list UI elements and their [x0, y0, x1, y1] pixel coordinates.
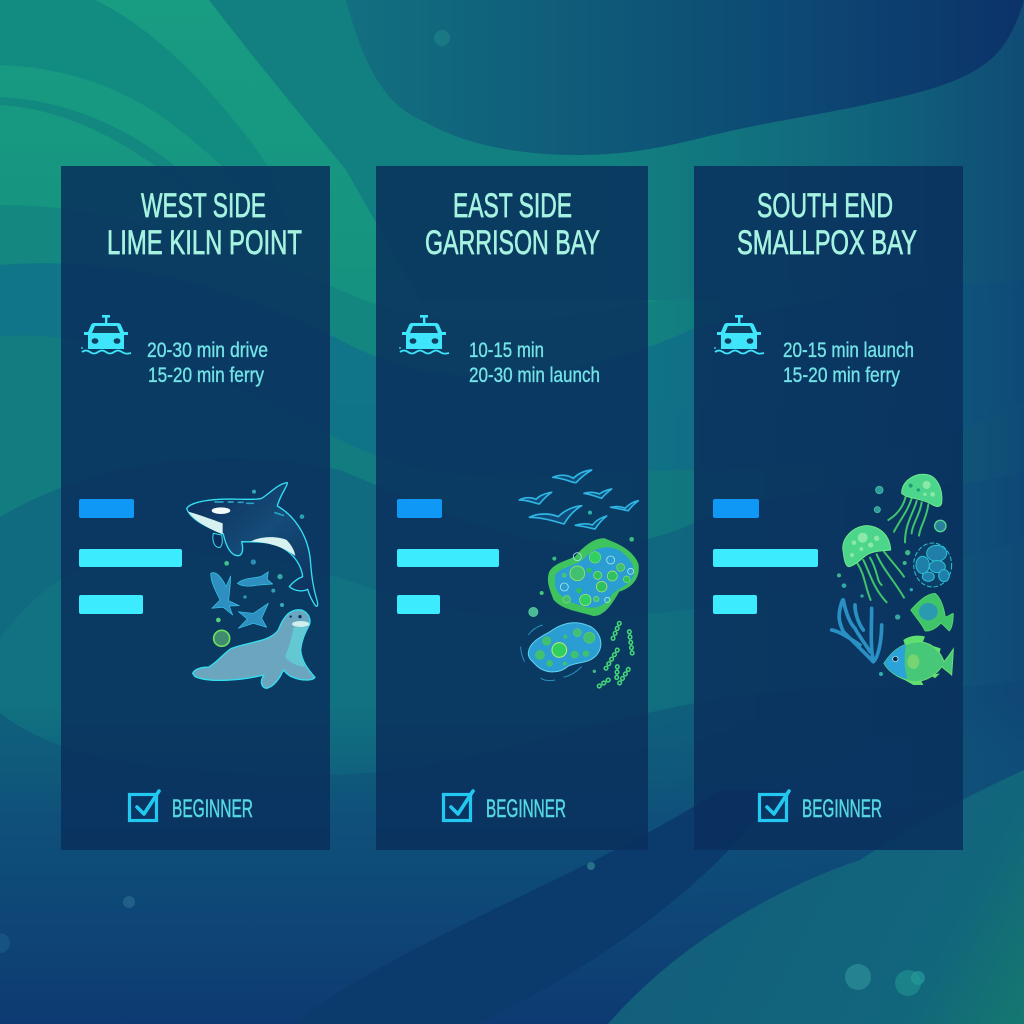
- plankton chains: [598, 623, 633, 687]
- travel times: [783, 339, 914, 387]
- heading: East Side: GARRISON BAY: [425, 224, 600, 262]
- coral: [832, 600, 882, 662]
- birds: [519, 470, 638, 529]
- panel: South End: [694, 166, 963, 850]
- algae colony large: [548, 538, 639, 616]
- travel times: 20-30 min launch: [469, 364, 600, 387]
- small fish: [911, 593, 953, 631]
- icon: car ferry: [399, 315, 449, 354]
- illustration: birds, algae, plankton: [519, 470, 639, 687]
- icon: car ferry: [714, 315, 764, 354]
- bubbles: [529, 511, 634, 673]
- heading: East Side: EAST SIDE: [453, 187, 572, 225]
- level: beginner: [130, 791, 253, 823]
- jellyfish lower: [843, 526, 904, 602]
- travel times: [147, 339, 268, 387]
- algae colony small: [521, 623, 601, 681]
- heading: West Side: [107, 187, 302, 262]
- bar chart: [397, 499, 499, 614]
- travel times: 20-15 min launch: [783, 339, 914, 362]
- heading: East Side: [425, 187, 600, 262]
- travel times: 15-20 min ferry: [148, 364, 264, 387]
- level: beginner: BEGINNER: [486, 795, 566, 823]
- bar chart: [713, 499, 818, 614]
- bubbles: [837, 486, 946, 676]
- level: beginner: BEGINNER: [802, 795, 882, 823]
- travel times: [469, 339, 600, 387]
- icon: car ferry: [81, 315, 131, 354]
- sea rock: [914, 543, 952, 587]
- heading: South End: SMALLPOX BAY: [737, 224, 917, 262]
- illustration: jellyfish, coral, fish: [832, 474, 953, 685]
- seal: [193, 610, 315, 688]
- heading: South End: [737, 187, 917, 262]
- big fish: [884, 636, 953, 685]
- panel: West Side: [61, 166, 330, 850]
- travel times: 15-20 min ferry: [783, 364, 900, 387]
- heading: South End: SOUTH END: [757, 187, 893, 225]
- orca: [187, 483, 318, 606]
- travel times: 10-15 min: [469, 339, 544, 362]
- level: beginner: [444, 791, 566, 823]
- bar chart: [79, 499, 182, 614]
- jellyfish upper: [888, 474, 942, 542]
- heading: West Side: LIME KILN POINT: [107, 224, 302, 262]
- heading: West Side: WEST SIDE: [141, 187, 266, 225]
- illustration: orca, rays, seal: [187, 483, 318, 688]
- level: beginner: [760, 791, 882, 823]
- travel times: 20-30 min drive: [147, 339, 268, 362]
- bubbles: [214, 490, 304, 646]
- small rays and starfish: [211, 572, 273, 628]
- panel: East Side: [376, 166, 648, 850]
- level: beginner: BEGINNER: [172, 795, 253, 823]
